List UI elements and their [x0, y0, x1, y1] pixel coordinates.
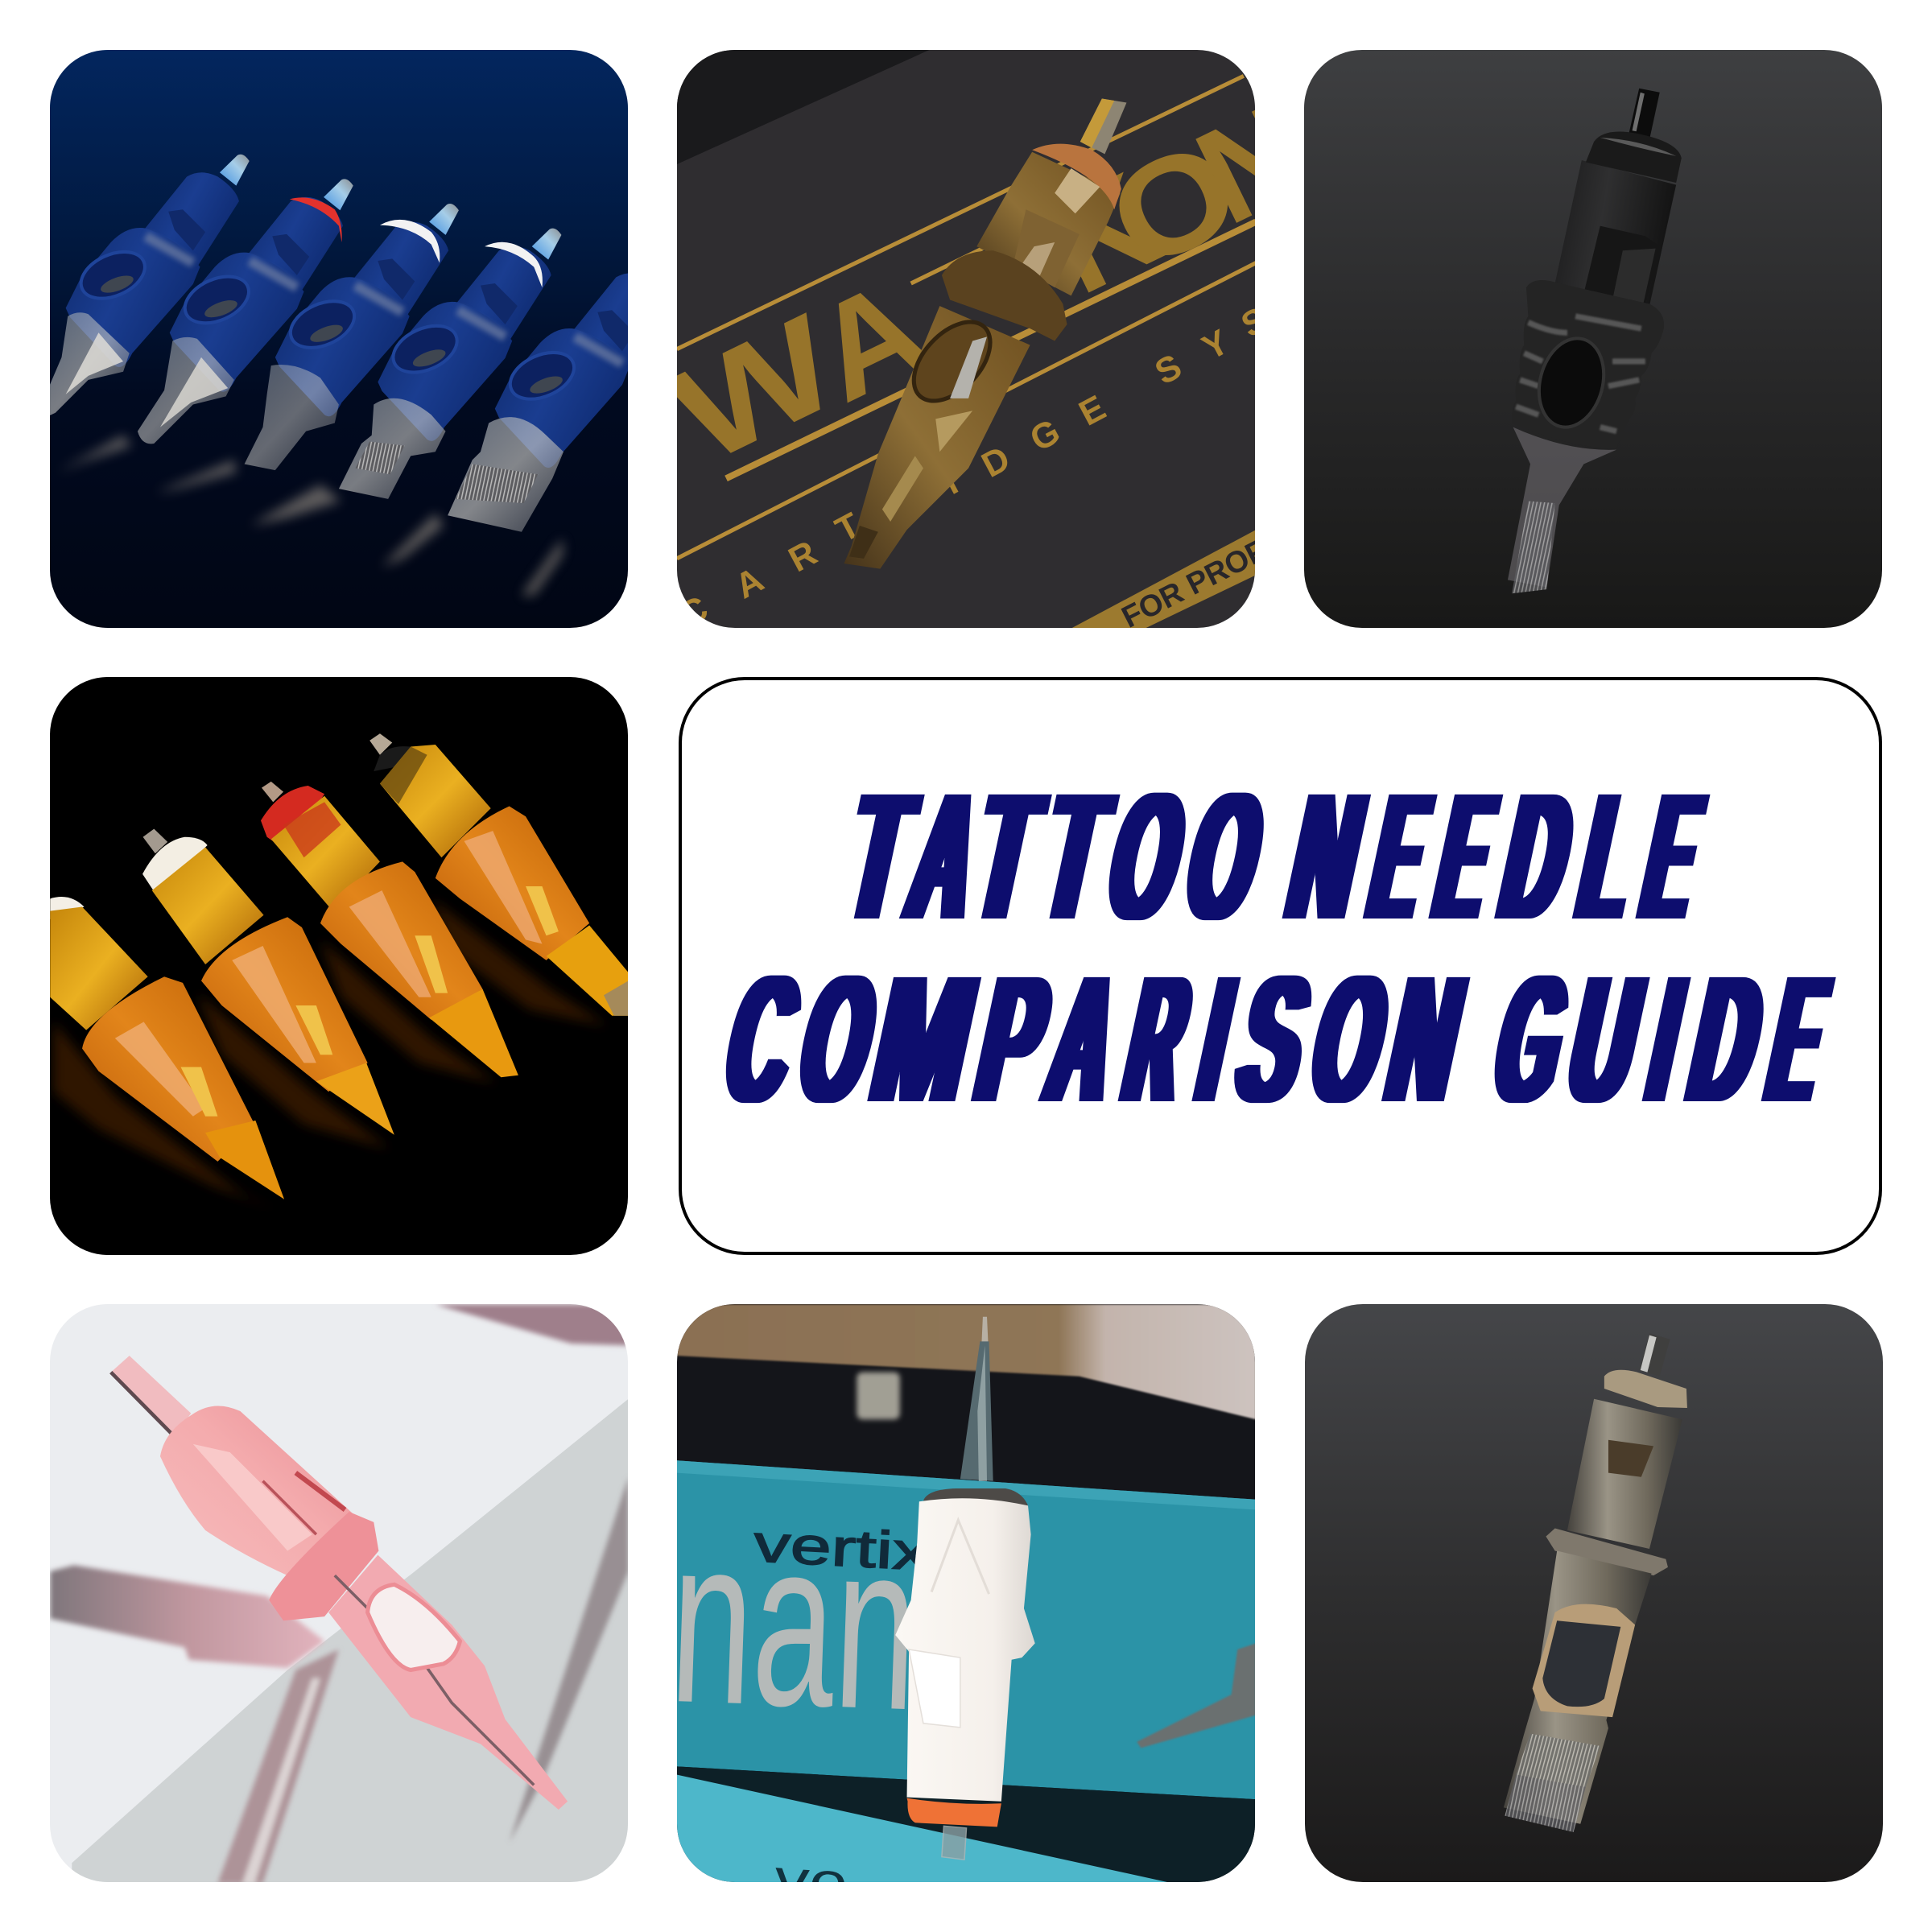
reflections	[57, 436, 563, 596]
gold foil subtitle: D	[976, 439, 1017, 485]
navy background	[50, 50, 628, 628]
pale background	[50, 1304, 628, 1882]
box lettering: nano: nan	[667, 1486, 922, 1760]
gold foil stripe	[1071, 530, 1256, 629]
white cartridge	[895, 1317, 1035, 1860]
title: E	[1422, 756, 1509, 957]
dark card background	[677, 50, 1255, 628]
lower box lettering: ve	[773, 1848, 850, 1913]
panel: clear cartridge on grey	[1305, 1304, 1883, 1882]
title: P	[963, 939, 1063, 1140]
gold foil lines	[677, 76, 1256, 559]
needle 2	[138, 179, 353, 444]
gold foil subtitle: Y	[1196, 322, 1235, 368]
gold foil subtitle: T	[829, 506, 867, 550]
needle 1	[49, 155, 250, 415]
title: O	[1298, 939, 1403, 1140]
amber cartridge	[844, 98, 1126, 569]
blurred object	[857, 1373, 900, 1419]
panel: amber-orange cartridges on black	[50, 677, 629, 1255]
cast shadows	[50, 1304, 629, 1884]
grey block	[72, 1399, 629, 1884]
white band	[380, 220, 440, 263]
gold foil subtitle: S	[1235, 299, 1274, 345]
title: I	[1635, 939, 1698, 1140]
title: D	[1487, 756, 1587, 957]
title: T	[959, 756, 1055, 957]
box lettering: vertix	[752, 1513, 931, 1582]
gold foil wordmark: A	[791, 250, 949, 431]
card outline	[680, 679, 1880, 1253]
needle 4	[339, 229, 561, 499]
title	[712, 756, 1842, 1140]
gold foil wordmark: K	[1027, 144, 1181, 323]
title: U	[1554, 939, 1657, 1140]
title: T	[832, 756, 927, 957]
gold foil subtitle: C	[674, 588, 715, 635]
white band	[485, 242, 543, 287]
panel: pink cartridge on white	[50, 1304, 629, 1884]
needle 3	[261, 782, 518, 1077]
panel: white cartridge on teal box	[667, 1304, 1256, 1913]
black background	[50, 677, 628, 1255]
title: S	[1224, 939, 1323, 1140]
title: O	[1172, 756, 1278, 957]
gold foil wordmark: N	[1174, 74, 1329, 253]
panel: amber cartridge on gold-foil box	[677, 50, 1255, 628]
teal box	[677, 1460, 1256, 1799]
grey gradient background	[1304, 50, 1882, 628]
title: T	[1027, 756, 1123, 957]
gold foil subtitle: G	[1024, 411, 1067, 459]
gold foil subtitle: A	[729, 559, 770, 607]
needle 1	[50, 897, 284, 1199]
title: M	[858, 939, 990, 1140]
gold foil wordmark: W	[650, 287, 861, 493]
gold foil subtitle: E	[1073, 388, 1112, 434]
panel: black cartridge on grey	[1304, 50, 1882, 628]
lower teal box	[677, 1775, 1174, 1884]
needle 4	[369, 733, 629, 1016]
gold foil subtitle: S	[1149, 347, 1188, 393]
gold foil wordmark: O	[1087, 110, 1261, 299]
title: L	[1565, 756, 1653, 957]
black cartridge	[1508, 89, 1682, 593]
title: D	[1675, 939, 1778, 1140]
reflections	[53, 898, 608, 1211]
title: E	[1629, 756, 1715, 957]
gold foil wordmark	[677, 102, 1255, 453]
title: C	[712, 939, 812, 1140]
title: G	[1480, 939, 1583, 1140]
panel: blue cartridges on navy	[49, 50, 679, 628]
title: E	[1755, 939, 1842, 1140]
title: I	[1185, 939, 1247, 1140]
title: A	[1034, 939, 1133, 1140]
blurred background needle	[1137, 1643, 1256, 1748]
gold foil subtitle: I	[937, 463, 964, 502]
title: R	[1111, 939, 1204, 1140]
title: N	[1274, 756, 1378, 957]
panel: title card	[680, 679, 1880, 1253]
gold foil subtitle: R	[782, 533, 824, 580]
shadowed corner	[677, 50, 929, 164]
blue cartridge illustrations	[49, 155, 679, 596]
dark gap	[677, 1766, 1256, 1884]
stripe caption: FOR PROFESSIONALS	[1117, 453, 1428, 634]
gold foil subtitle	[674, 299, 1274, 635]
red band	[290, 197, 342, 242]
title: O	[786, 939, 891, 1140]
grey gradient background	[1305, 1304, 1883, 1882]
title: E	[1356, 756, 1443, 957]
title: A	[895, 756, 994, 957]
clear cartridge	[1504, 1333, 1687, 1832]
teal scene background	[677, 1304, 1255, 1882]
title: O	[1094, 756, 1200, 957]
tan wall	[677, 1304, 1256, 1419]
needle 2	[142, 829, 394, 1135]
needle 5	[448, 274, 628, 532]
title: N	[1374, 939, 1478, 1140]
needle 3	[245, 204, 459, 470]
pink cartridge	[111, 1356, 568, 1810]
